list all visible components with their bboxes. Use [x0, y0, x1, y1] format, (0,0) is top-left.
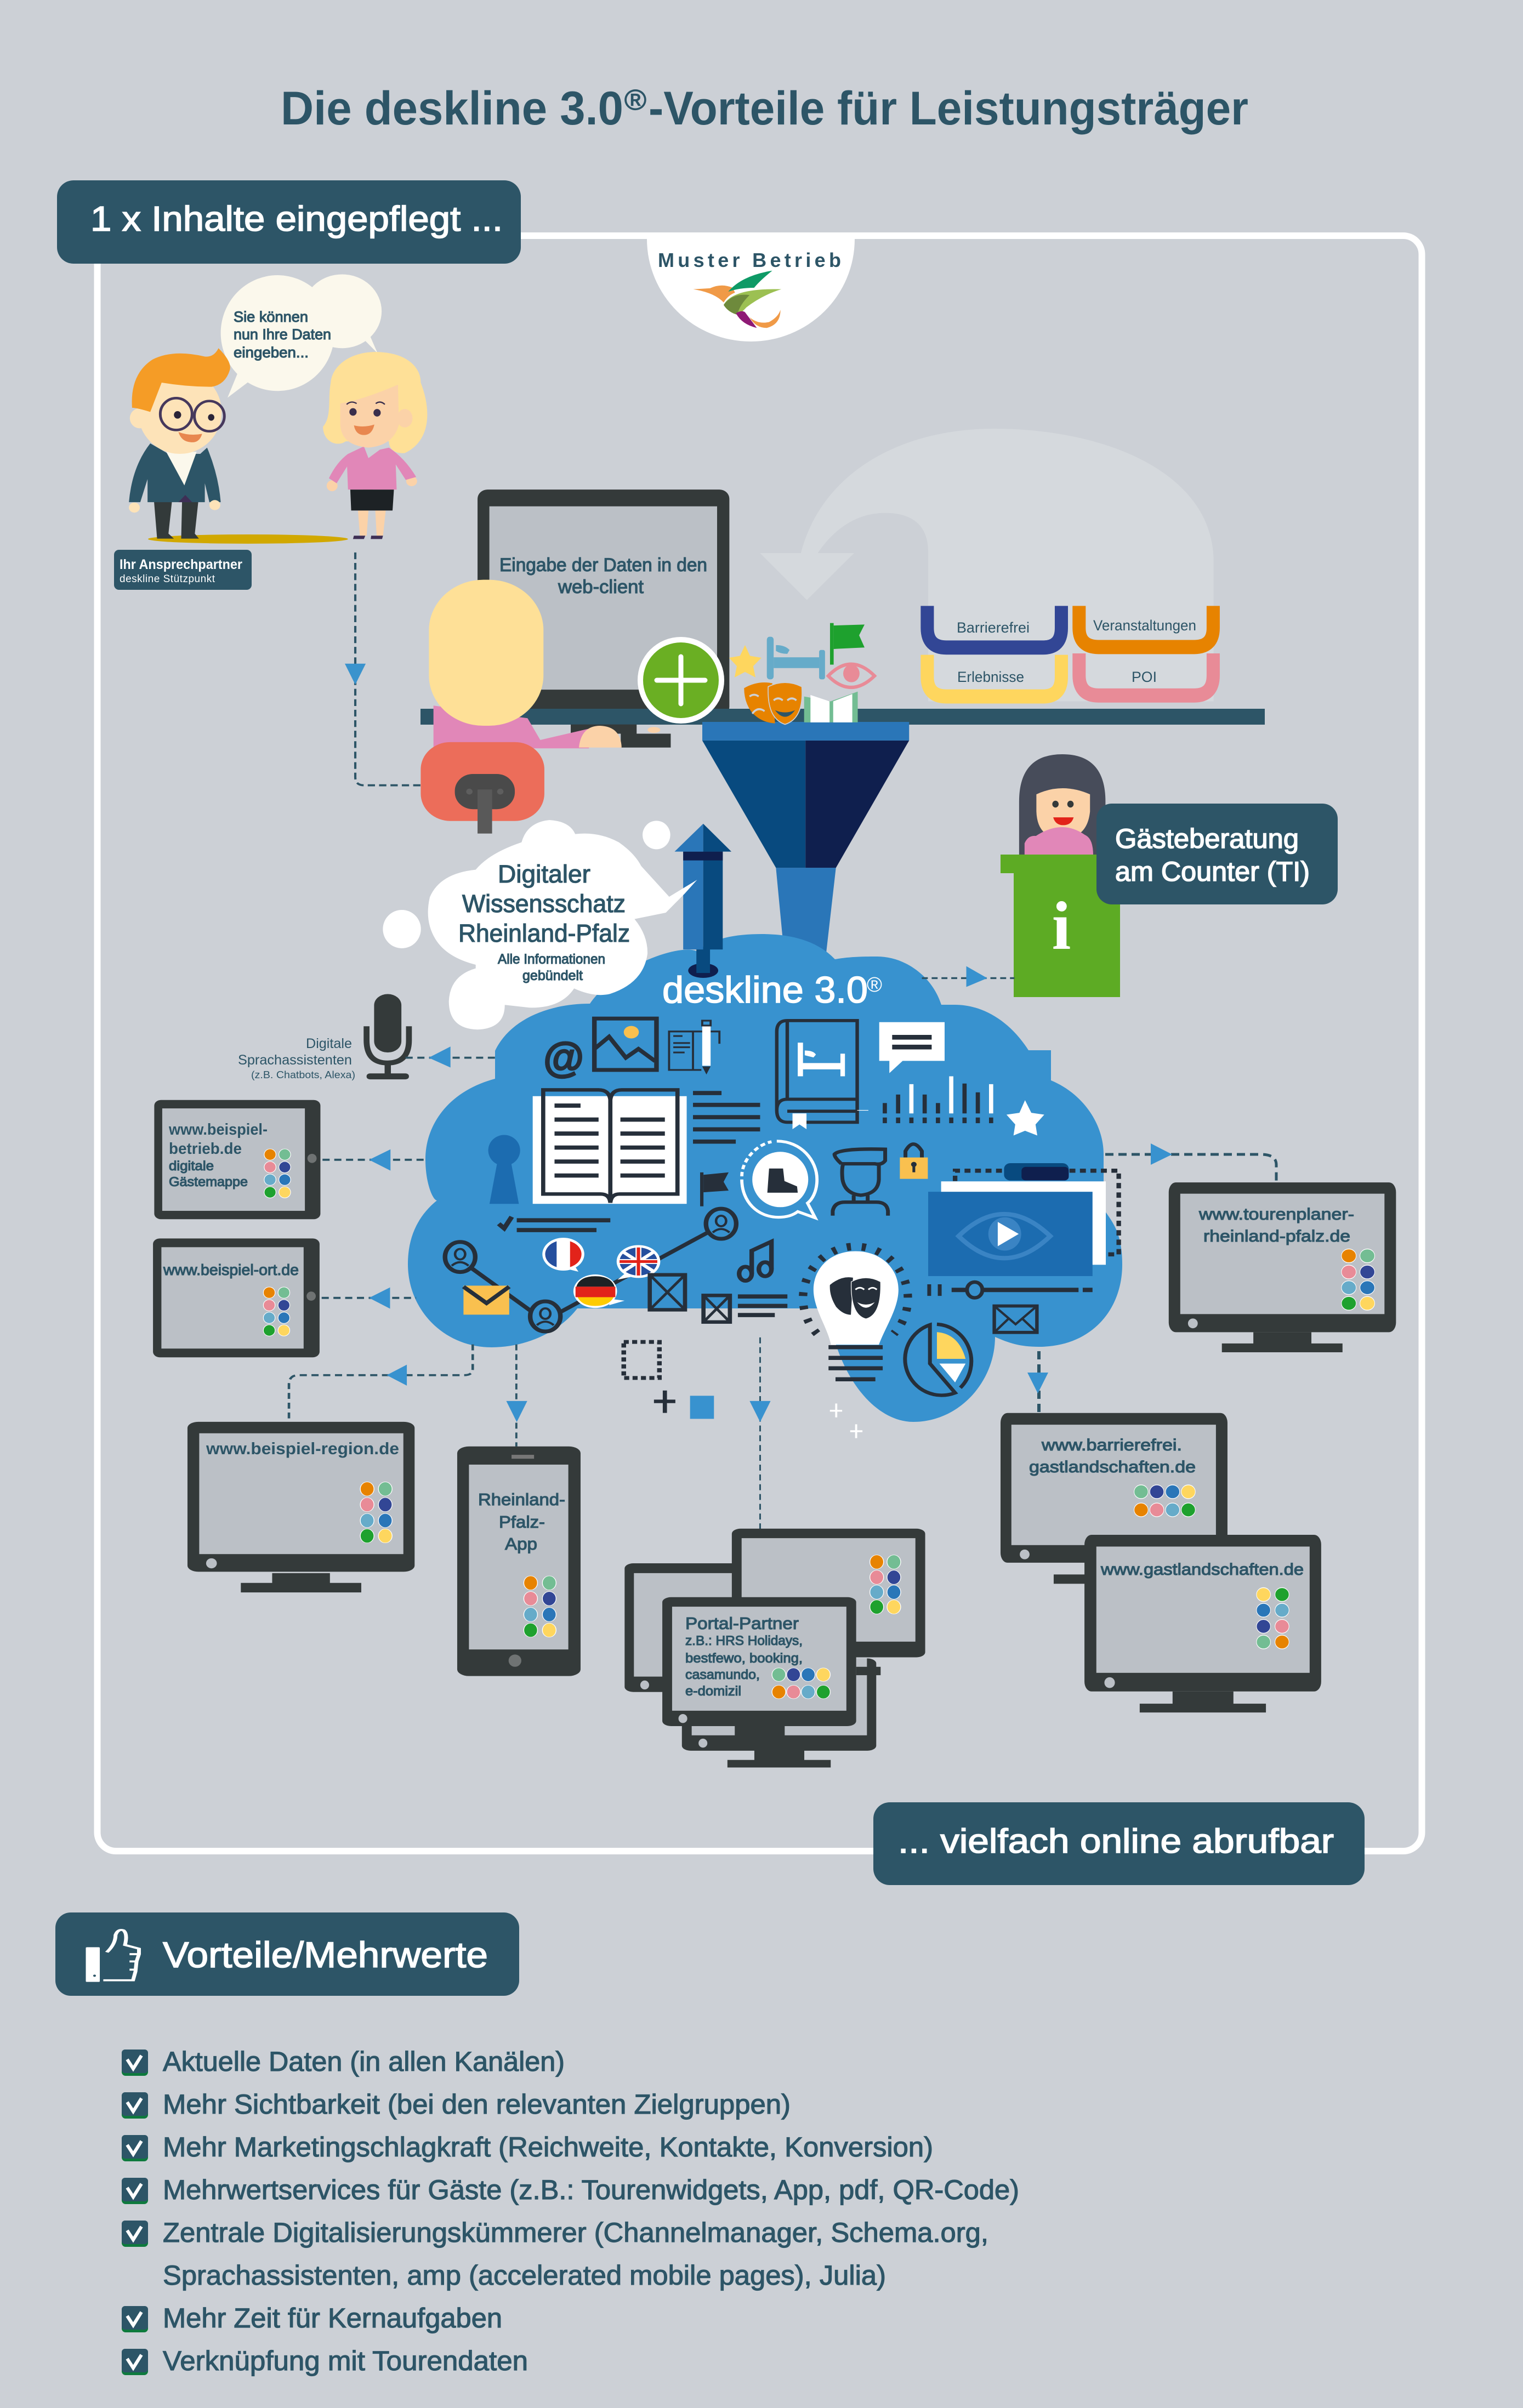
icon group: cloud icons right — [742, 1021, 1119, 1438]
icon: network — [445, 1209, 736, 1331]
monitor: web-client — [478, 489, 729, 716]
text: item 5 — [163, 2217, 988, 2291]
icon: checkbox 4 — [122, 2178, 148, 2204]
thought cloud: Alle Informationen — [498, 952, 605, 967]
icon: padlock — [900, 1144, 928, 1179]
text: item 7: Verknüpfung mit Tourendaten — [163, 2346, 528, 2376]
icon: checklist — [499, 1217, 610, 1230]
icon: checkbox 7 — [122, 2349, 148, 2375]
icons above funnel: star, bed, flag, eye, masks, book — [729, 623, 874, 724]
thought cloud: Rheinland-Pfalz — [458, 919, 630, 947]
icon: thumbs up — [86, 1930, 140, 1982]
text: item 2: Mehr Sichtbarkeit (bei den relevanten Zielgruppen) — [163, 2089, 791, 2120]
device group: Portal-Partner: e-domizil — [685, 1684, 741, 1699]
monitor: www.tourenplaner-rheinland-pfalz.de — [1169, 1182, 1396, 1352]
icon: bar chart — [883, 1077, 993, 1123]
heading badge: Vorteile/Mehrwerte — [55, 1912, 519, 1996]
illustration: seated woman at desk — [420, 580, 670, 834]
monitor: www.tourenplaner-rheinland-pfalz.de: rheinland-pfalz.de — [1203, 1227, 1350, 1245]
counter: Gästeberatung: i — [1052, 889, 1071, 964]
label: Ihr Ansprechpartner: deskline Stützpunkt — [120, 573, 215, 585]
categories: data boxes — [927, 606, 1213, 697]
text: item 3: Mehr Marketingschlagkraft (Reichweite, Kontakte, Konversion) — [163, 2132, 933, 2162]
text: item 6: Mehr Zeit für Kernaufgaben — [163, 2303, 502, 2333]
monitor: www.barrierefrei.gastlandschaften.de: www.barrierefrei. — [1041, 1436, 1182, 1454]
categories: data boxes: Barrierefrei — [957, 619, 1030, 636]
categories: data boxes: Veranstaltungen — [1093, 617, 1196, 634]
arrows: cloud to left channels — [289, 1046, 771, 1586]
icon: checkbox 2 — [122, 2092, 148, 2119]
text: item 5: Zentrale Digitalisierungskümmerer (Channelmanager, Schema.org, — [163, 2217, 988, 2248]
monitor: www.beispiel-region.de: www.beispiel-region.de — [206, 1439, 399, 1458]
thought cloud: Wissensschatz — [462, 890, 626, 918]
icon: flag — [700, 1172, 729, 1206]
phone: Rheinland-Pfalz-App: Pfalz- — [499, 1512, 545, 1532]
icon: person outline — [833, 1149, 888, 1216]
thought cloud: gebündelt — [522, 968, 583, 983]
funnel — [702, 722, 909, 963]
rocket arrow: upward — [674, 824, 731, 978]
device group: Portal-Partner: casamundo, — [685, 1667, 760, 1682]
device group: Portal-Partner: Portal-Partner — [685, 1614, 799, 1633]
text: item 4: Mehrwertservices für Gäste (z.B.: Tourenwidgets, App, pdf, QR-Code) — [163, 2174, 1019, 2205]
icon: checkbox 3 — [122, 2135, 148, 2161]
text: item 5: Sprachassistenten, amp (accelerated mobile pages), Julia) — [163, 2260, 886, 2291]
illustration: woman — [323, 352, 427, 539]
counter: Gästeberatung — [1001, 754, 1338, 997]
speech text: Sie können — [234, 309, 308, 325]
speech text — [234, 309, 331, 361]
categories: data boxes: Erlebnisse — [957, 669, 1024, 685]
large grey arrow: data categories to funnel — [760, 429, 1214, 702]
icon: boot bubble — [742, 1141, 817, 1218]
cloud: deskline 3.0 — [408, 934, 1122, 1422]
list: Vorteile — [122, 2046, 1019, 2376]
label: Digitale Sprachassistenten — [238, 1036, 355, 1080]
categories: data boxes: POI — [1132, 669, 1157, 685]
icon group: cloud icons left — [445, 1018, 787, 1331]
monitor: www.gastlandschaften.de: www.gastlandschaften.de — [1100, 1561, 1304, 1579]
label: Ihr Ansprechpartner: Ihr Ansprechpartner — [120, 557, 242, 572]
heading badge: 1 x Inhalte eingepflegt: 1 x Inhalte eingepflegt ... — [90, 199, 503, 238]
icon: checkbox 1 — [122, 2050, 148, 2076]
icon: pie chart — [905, 1324, 971, 1395]
icon: open book — [533, 1090, 687, 1204]
monitor: front — [662, 1597, 856, 1735]
heading badge: 1 x Inhalte eingepflegt — [57, 180, 521, 264]
tablet: www.beispiel-betrieb.de: Gästemappe — [169, 1175, 248, 1189]
tablet: www.beispiel-betrieb.de — [154, 1100, 320, 1219]
icon: keyhole — [488, 1135, 520, 1204]
decoration: dotted square, plus, blue square — [624, 1342, 714, 1419]
thought cloud: Digitaler — [498, 860, 590, 888]
heading badge: Vorteile/Mehrwerte: Vorteile/Mehrwerte — [163, 1934, 488, 1975]
title: -Vorteile für Leistungsträger — [649, 82, 1248, 135]
counter: Gästeberatung: am Counter (TI) — [1115, 856, 1310, 887]
monitor: www.tourenplaner-rheinland-pfalz.de: www.tourenplaner- — [1198, 1205, 1354, 1223]
monitor: www.beispiel-region.de — [187, 1422, 414, 1592]
logo: Muster Betrieb: Muster Betrieb — [658, 249, 841, 271]
at sign: @ — [543, 1034, 584, 1081]
monitor: back right — [732, 1529, 925, 1657]
thought cloud — [383, 820, 697, 1029]
icon: green plus — [638, 637, 724, 724]
device group: Portal-Partner: bestfewo, booking, — [685, 1651, 803, 1666]
cloud: deskline 3.0: ® — [867, 974, 882, 997]
counter: Gästeberatung: Gästeberatung — [1115, 823, 1299, 854]
icon: picture — [594, 1018, 656, 1070]
illustration: man — [129, 348, 348, 544]
label: Digitale Sprachassistenten: (z.B. Chatbots, Alexa) — [251, 1069, 355, 1080]
icon: star — [1007, 1100, 1044, 1135]
icon: notebook and pencil — [669, 1021, 719, 1074]
title: ® — [624, 84, 646, 116]
desk — [420, 709, 1265, 725]
icon: text lines — [693, 1093, 760, 1142]
cloud: deskline 3.0: deskline 3.0 — [662, 969, 868, 1011]
monitor: www.gastlandschaften.de — [1084, 1535, 1321, 1712]
icon: mail outline — [995, 1306, 1037, 1333]
monitor: web-client: Eingabe der Daten in den — [499, 555, 707, 576]
microphone — [367, 994, 409, 1079]
icon: French flag bubble — [542, 1238, 584, 1272]
label: Digitale Sprachassistenten: Digitale — [306, 1036, 352, 1051]
speech bubbles — [221, 275, 382, 398]
icon: hummingbird — [693, 271, 781, 328]
title — [281, 82, 1248, 135]
icon: hotel book — [777, 1021, 868, 1129]
icon: checkbox 6 — [122, 2306, 148, 2332]
arrow: cloud to counter — [922, 966, 1015, 987]
label: Digitale Sprachassistenten: Sprachassistenten — [238, 1052, 352, 1068]
speech text: nun Ihre Daten — [234, 326, 331, 343]
phone: Rheinland-Pfalz-App: App — [505, 1534, 537, 1553]
heading badge: vielfach online abrufbar: ... vielfach online abrufbar — [898, 1823, 1334, 1860]
logo: Muster Betrieb — [647, 239, 855, 341]
phone: Rheinland-Pfalz-App — [457, 1447, 581, 1676]
monitor: middle — [682, 1659, 880, 1767]
heading badge: vielfach online abrufbar — [873, 1802, 1365, 1885]
speech text: eingeben... — [234, 344, 309, 361]
device group: Portal-Partner — [624, 1529, 925, 1767]
tablet: back left — [624, 1563, 742, 1692]
icon: placeholder boxes — [650, 1275, 787, 1322]
icon: video player — [928, 1163, 1119, 1298]
icon: checkbox 5 — [122, 2221, 148, 2247]
icon: music note — [739, 1242, 771, 1281]
icon: envelope — [463, 1285, 509, 1314]
icon: small plus signs — [830, 1403, 862, 1438]
icon: German flag bubble — [573, 1274, 624, 1308]
arrows: cloud to right channels — [1027, 1143, 1276, 1413]
tablet: www.beispiel-betrieb.de: betrieb.de — [169, 1140, 242, 1158]
monitor: www.barrierefrei.gastlandschaften.de — [1001, 1413, 1228, 1584]
title: Die deskline 3.0 — [281, 82, 623, 135]
tablet: www.beispiel-ort.de — [153, 1238, 320, 1357]
icon: UK flag bubble — [617, 1245, 660, 1280]
icon: light bulb with theatre masks — [803, 1246, 908, 1379]
tablet: www.beispiel-betrieb.de: digitale — [169, 1159, 214, 1174]
tablet: www.beispiel-ort.de: www.beispiel-ort.de — [163, 1261, 299, 1278]
monitor: web-client: web-client — [558, 577, 644, 597]
icon: chat bubble — [879, 1022, 945, 1073]
text: item 1: Aktuelle Daten (in allen Kanälen) — [163, 2046, 565, 2077]
monitor: www.barrierefrei.gastlandschaften.de: gastlandschaften.de — [1029, 1458, 1196, 1476]
tablet: www.beispiel-betrieb.de: www.beispiel- — [168, 1121, 268, 1138]
arrow: contact to web-client — [345, 553, 422, 785]
phone: Rheinland-Pfalz-App: Rheinland- — [478, 1490, 565, 1509]
device group: Portal-Partner: z.B.: HRS Holidays, — [685, 1633, 803, 1648]
label: Ihr Ansprechpartner — [114, 550, 252, 590]
